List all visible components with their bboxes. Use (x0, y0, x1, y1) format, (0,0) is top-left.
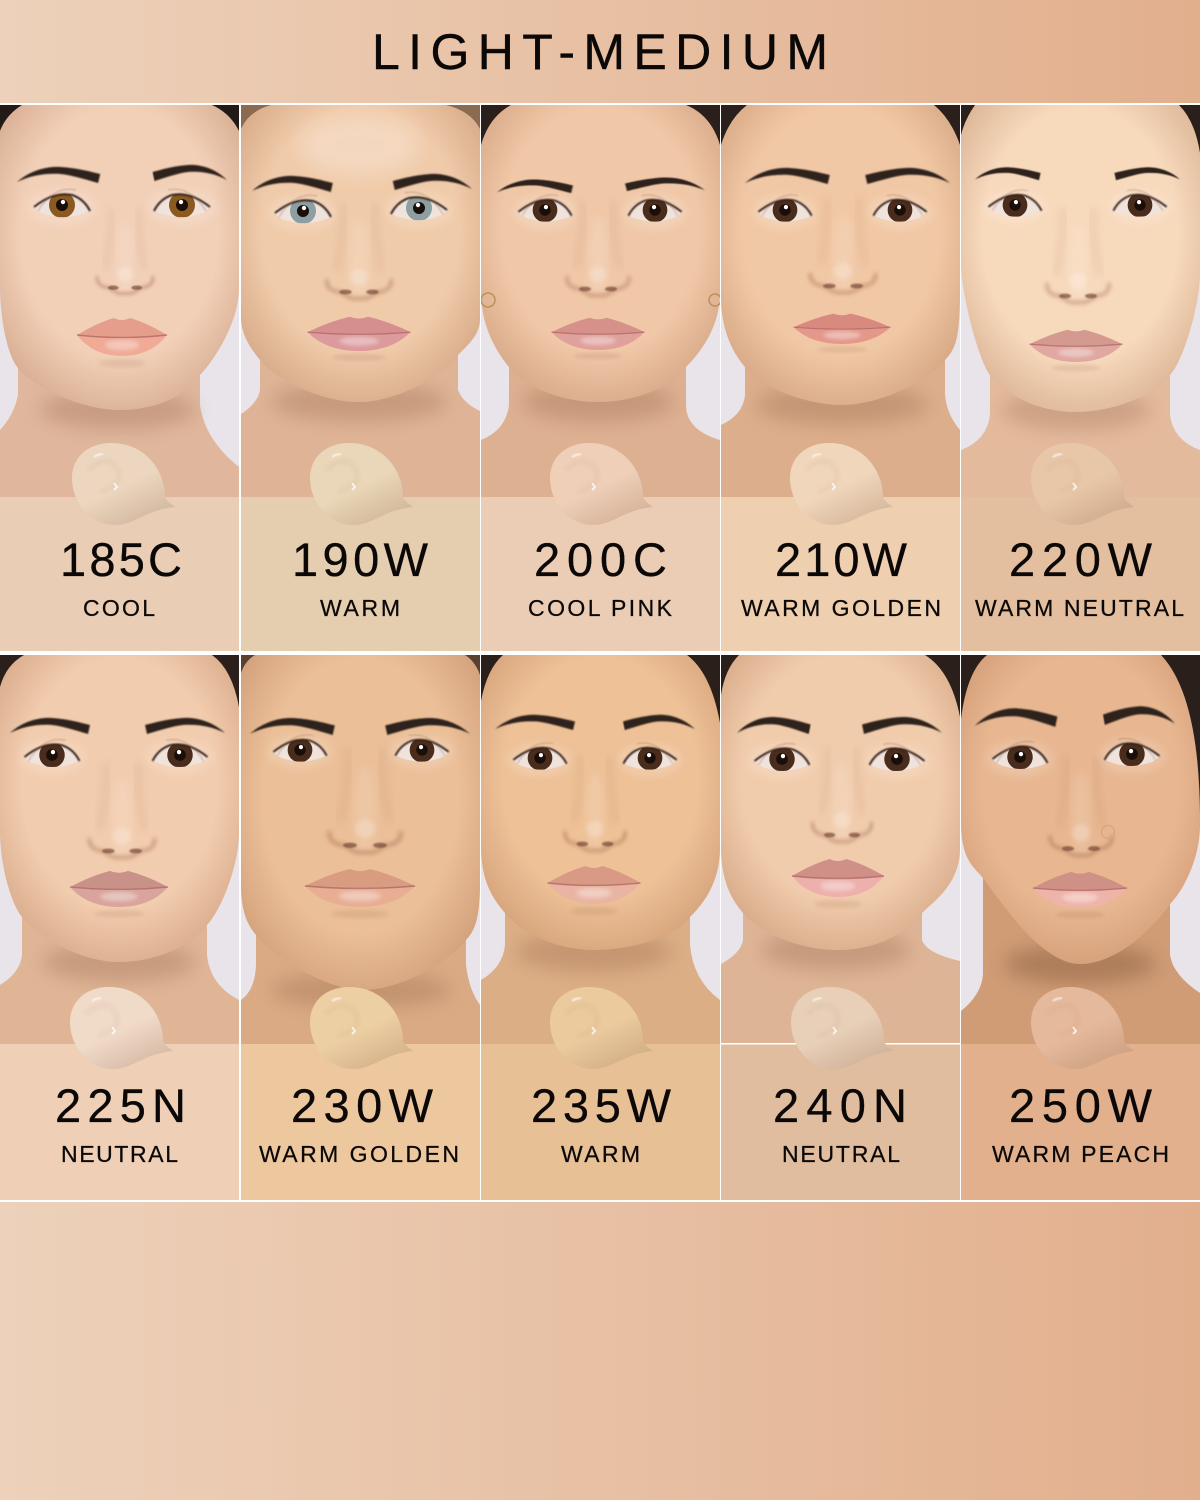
shade code: 235W (531, 1079, 672, 1132)
shade band (0, 497, 239, 651)
shade band (481, 1044, 720, 1200)
card: 185C cool (0, 105, 239, 651)
card: 230W warm golden (241, 655, 480, 1200)
shade code: 210W (775, 533, 908, 586)
undertone: WARM GOLDEN (259, 1141, 459, 1167)
photo: 220W model (961, 105, 1200, 497)
shade code: 220W (1009, 533, 1153, 586)
photo: 225N model (0, 655, 239, 1044)
card: 220W warm neutral (961, 105, 1200, 651)
undertone: COOL PINK (528, 595, 673, 621)
shade band (721, 1044, 960, 1200)
swatch (1031, 443, 1134, 525)
photo: 210W model (721, 105, 960, 497)
undertone: WARM PEACH (992, 1141, 1169, 1167)
swatch (310, 443, 413, 525)
undertone: NEUTRAL (782, 1141, 900, 1167)
card: 250W warm peach (961, 655, 1200, 1200)
swatch (72, 443, 175, 525)
swatch (550, 443, 653, 525)
shade band (721, 497, 960, 651)
shade band (961, 497, 1200, 651)
photo: 240N model (721, 655, 960, 1044)
undertone: WARM (561, 1141, 640, 1167)
swatch (70, 987, 173, 1069)
swatch (790, 443, 893, 525)
card: 190W warm (241, 105, 480, 651)
card: 200C cool pink (481, 105, 721, 651)
photo: 200C model (481, 105, 721, 497)
shade band (961, 1044, 1200, 1200)
title: LIGHT-MEDIUM (372, 24, 828, 80)
swatch (791, 987, 894, 1069)
shade code: 185C (60, 533, 182, 586)
card: 210W warm golden (721, 105, 960, 651)
photo: 230W model (241, 655, 480, 1044)
shade code: 190W (292, 533, 429, 586)
shade code: 230W (291, 1079, 434, 1132)
undertone: WARM NEUTRAL (975, 595, 1184, 621)
shade code: 250W (1009, 1079, 1153, 1132)
photo: 190W model (241, 105, 480, 497)
undertone: NEUTRAL (61, 1141, 178, 1167)
undertone: WARM GOLDEN (741, 595, 941, 621)
undertone: WARM (320, 595, 400, 621)
photo: 235W model (481, 655, 720, 1044)
shade band (241, 497, 480, 651)
shade band (0, 1044, 239, 1200)
shade band (481, 497, 720, 651)
shade band (241, 1044, 480, 1200)
white grid behind cards (0, 103, 1200, 1202)
swatch (1031, 987, 1134, 1069)
photo: 250W model (961, 655, 1200, 1044)
shade code: 225N (55, 1079, 186, 1132)
swatch divider line (721, 1043, 960, 1044)
card: 240N neutral (721, 655, 960, 1200)
swatch (310, 987, 413, 1069)
swatch (550, 987, 653, 1069)
shade code: 240N (773, 1079, 907, 1132)
undertone: COOL (83, 595, 155, 621)
card: 225N neutral (0, 655, 239, 1200)
card: 235W warm (481, 655, 720, 1200)
photo: 185C model (0, 105, 239, 497)
shade code: 200C (534, 533, 667, 586)
